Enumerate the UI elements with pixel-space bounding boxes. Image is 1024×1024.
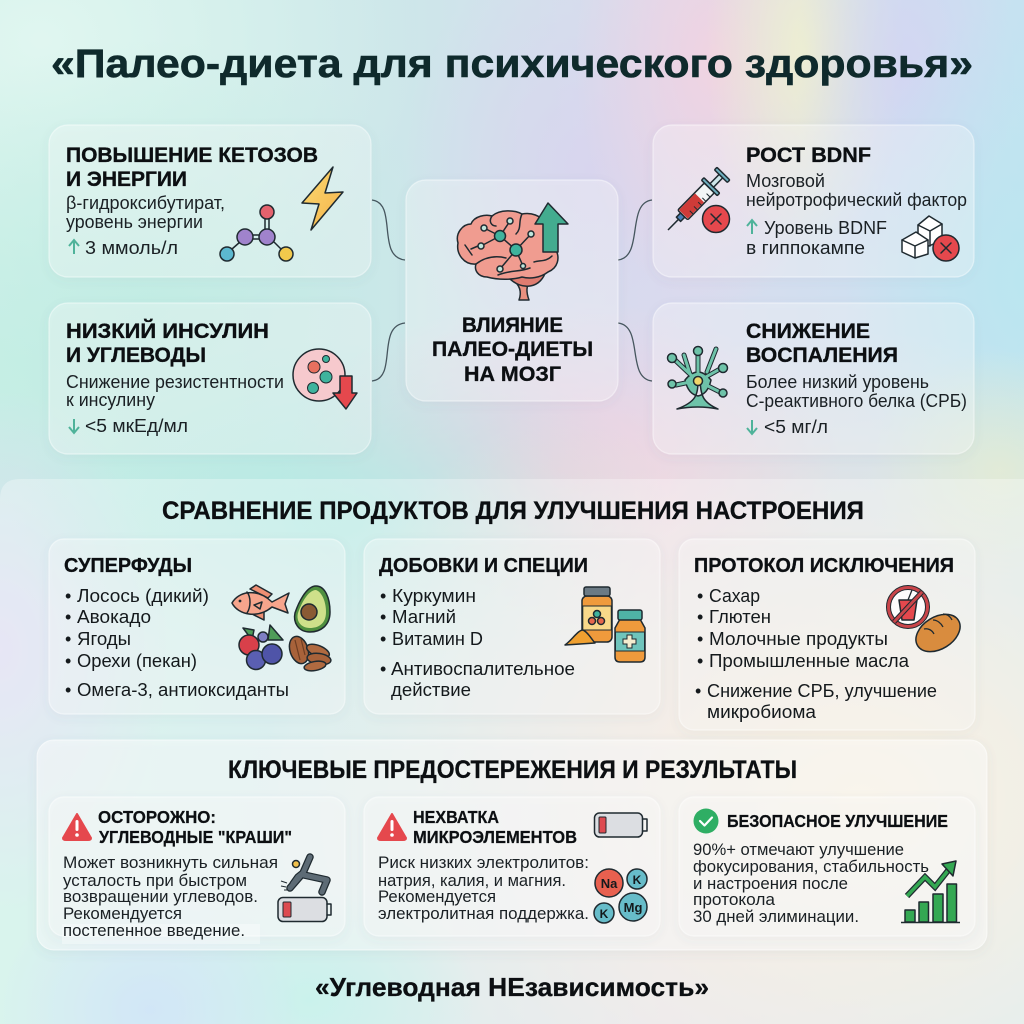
icon: supplement jar with powder — [565, 587, 612, 645]
text: inflammation description: С-реактивного белка (СРБ) — [746, 391, 967, 411]
card: safe improvement — [679, 797, 975, 936]
heading: food comparison: СРАВНЕНИЕ ПРОДУКТОВ ДЛЯ УЛУЧШЕНИЯ НАСТРОЕНИЯ — [162, 497, 864, 525]
list: elimination: • — [697, 629, 703, 649]
heading: insulin — [66, 318, 269, 367]
list: elimination: микробиома — [707, 702, 817, 722]
list: supplements: действие — [391, 680, 471, 700]
panel: warnings and results — [37, 740, 987, 950]
text: carb crashes: усталость при быстром — [63, 871, 247, 890]
connector: insulin card to centre — [372, 323, 405, 381]
list: superfoods: • — [65, 629, 71, 649]
list: superfoods: • — [65, 680, 71, 700]
icon: neuron — [668, 346, 728, 409]
panel: superfoods — [49, 539, 345, 714]
list: supplements — [380, 586, 575, 700]
card: carb crashes — [49, 797, 345, 944]
list: elimination: • — [697, 607, 703, 627]
list: superfoods: Омега-3, антиоксиданты — [77, 680, 289, 700]
text: carb crashes: постепенное введение. — [63, 921, 245, 940]
list: supplements: Магний — [392, 607, 456, 627]
heading: supplements: ДОБОВКИ И СПЕЦИИ — [379, 554, 588, 577]
text: BDNF description: нейротрофический фактор — [746, 190, 967, 210]
heading: ketones: И ЭНЕРГИИ — [66, 167, 187, 191]
text: safe improvement: фокусирования, стабильность — [693, 857, 929, 876]
list: elimination: Промышленные масла — [709, 651, 910, 671]
list: supplements: • — [380, 629, 386, 649]
panel: elimination protocol — [679, 539, 975, 730]
text: micronutrients: электролитная поддержка. — [378, 904, 589, 923]
icon: electrolytes — [594, 869, 647, 923]
heading: ketones — [66, 143, 318, 191]
icon: falling person — [281, 857, 327, 892]
heading: carb crashes — [98, 807, 292, 847]
list: elimination: • — [697, 586, 703, 606]
icon: low battery — [594, 813, 647, 837]
icon: electrolytes: Na — [601, 876, 618, 891]
icon: salmon — [232, 585, 289, 620]
icon: growth chart — [901, 861, 960, 922]
icon: syringe with cross — [660, 166, 731, 238]
icon: molecule — [220, 205, 293, 261]
icon: lightning bolt — [302, 167, 343, 230]
heading: micronutrients: НЕХВАТКА — [413, 807, 499, 827]
text: insulin description — [66, 372, 284, 410]
heading: ketones: ПОВЫШЕНИЕ КЕТОЗОВ — [66, 143, 318, 167]
list: supplements: Куркумин — [392, 586, 476, 606]
icon: brain with up arrow — [457, 203, 568, 300]
icon: electrolytes: K — [633, 873, 642, 887]
list: superfoods: • — [65, 607, 71, 627]
heading: inflammation — [746, 319, 898, 367]
text: safe improvement: 90%+ отмечают улучшение — [693, 840, 904, 859]
panel: supplements and spices — [364, 539, 660, 714]
text: ketones description: уровень энергии — [66, 212, 203, 232]
text: carb crashes — [63, 853, 278, 940]
icon: warning triangle — [63, 814, 91, 840]
text: carb crashes: Рекомендуется — [63, 904, 182, 923]
heading: carb crashes: ОСТОРОЖНО: — [98, 807, 216, 827]
heading: BDNF: РОСТ BDNF — [746, 143, 871, 167]
icon: berries — [239, 625, 283, 670]
text: carb crashes: Может возникнуть сильная — [63, 853, 278, 872]
footer tagline: «Углеводная НЕзависимость» — [315, 972, 709, 1002]
panel: reduced inflammation — [653, 303, 974, 454]
text: safe improvement: и настроения после — [693, 874, 848, 893]
icon: no sugary drink — [888, 588, 928, 626]
metric: BDNF in hippocampus — [746, 218, 887, 258]
metric: 3 mmol/l: 3 ммоль/л — [85, 238, 178, 258]
heading: elimination: ПРОТОКОЛ ИСКЛЮЧЕНИЯ — [694, 554, 954, 577]
text: micronutrients — [378, 853, 589, 923]
text: inflammation description: Более низкий уровень — [746, 372, 929, 392]
connector: ketosis card to centre — [372, 200, 405, 260]
list: supplements: • — [380, 659, 386, 679]
list: superfoods: Авокадо — [77, 607, 151, 627]
list: elimination — [695, 586, 937, 722]
panel: ketones and energy — [49, 125, 371, 277]
text: BDNF description: Мозговой — [746, 171, 825, 191]
text: micronutrients: Рекомендуется — [378, 887, 496, 906]
icon: avocado — [295, 586, 330, 632]
icon: sugar cubes with cross — [902, 216, 959, 261]
heading: micronutrients — [413, 807, 577, 847]
heading: warnings and results: КЛЮЧЕВЫЕ ПРЕДОСТЕРЕЖЕНИЯ И РЕЗУЛЬТАТЫ — [228, 756, 797, 784]
heading: inflammation: СНИЖЕНИЕ — [746, 319, 870, 343]
panel: low insulin and carbs — [49, 303, 371, 454]
panel: BDNF growth — [653, 125, 974, 277]
connector: centre to inflammation card — [618, 323, 652, 381]
icon: pecans — [286, 634, 332, 672]
text: micronutrients: натрия, калия, и магния. — [378, 871, 566, 890]
list: superfoods: Орехи (пекан) — [77, 651, 197, 671]
metric: BDNF in hippocampus: в гиппокампе — [746, 238, 865, 258]
text: insulin description: к инсулину — [66, 390, 155, 410]
heading: micronutrients: МИКРОЭЛЕМЕНТОВ — [413, 827, 577, 847]
title: «Палео-диета для психического здоровья» — [51, 42, 973, 86]
list: elimination: Глютен — [709, 607, 771, 627]
panel: central brain card — [406, 180, 618, 401]
list: supplements: • — [380, 586, 386, 606]
heading: carb crashes: УГЛЕВОДНЫЕ "КРАШИ" — [99, 827, 292, 847]
icon: cell with down arrow — [293, 349, 357, 409]
text: ketones description: β-гидроксибутират, — [66, 193, 225, 213]
list: superfoods: • — [65, 651, 71, 671]
heading: brain card — [432, 313, 593, 386]
list: elimination: • — [697, 651, 703, 671]
heading: brain card: ВЛИЯНИЕ — [462, 313, 563, 337]
list: superfoods: Лосось (дикий) — [77, 586, 209, 606]
text: inflammation description — [746, 372, 967, 411]
text: safe improvement: протокола — [693, 890, 776, 909]
icon: warning triangle — [378, 814, 406, 840]
text: safe improvement — [693, 840, 929, 926]
panel: comparison section backdrop — [0, 479, 1024, 1024]
icon: electrolytes: Mg — [624, 900, 642, 915]
text: safe improvement: 30 дней элиминации. — [693, 907, 859, 926]
text: insulin description: Снижение резистентности — [66, 372, 284, 392]
text: ketones description — [66, 193, 225, 232]
connector: centre to BDNF card — [618, 200, 652, 260]
heading: safe improvement: БЕЗОПАСНОЕ УЛУЧШЕНИЕ — [727, 811, 948, 831]
icon: medicine bottle — [615, 610, 645, 662]
heading: inflammation: ВОСПАЛЕНИЯ — [746, 343, 898, 367]
list: supplements: Антивоспалительное — [391, 659, 575, 679]
list: superfoods: • — [65, 586, 71, 606]
heading: brain card: НА МОЗГ — [464, 362, 561, 386]
list: superfoods: Ягоды — [77, 629, 131, 649]
text: BDNF description — [746, 171, 967, 210]
icon: low battery — [278, 898, 331, 922]
heading: insulin: НИЗКИЙ ИНСУЛИН — [66, 318, 269, 343]
list: elimination: • — [695, 681, 701, 701]
heading: insulin: И УГЛЕВОДЫ — [66, 343, 206, 367]
list: elimination: Сахар — [709, 586, 760, 606]
list: elimination: Молочные продукты — [709, 629, 888, 649]
card: micronutrient shortage — [364, 797, 660, 936]
list: supplements: • — [380, 607, 386, 627]
metric: CRP level: <5 мг/л — [764, 417, 828, 437]
icon: green check — [694, 808, 718, 834]
icon: bread loaf — [909, 607, 967, 659]
list: supplements: Витамин D — [392, 629, 483, 649]
text: micronutrients: Риск низких электролитов: — [378, 853, 589, 872]
text: carb crashes: возвращении углеводов. — [63, 887, 258, 906]
heading: brain card: ПАЛЕО-ДИЕТЫ — [432, 337, 593, 361]
heading: superfoods: СУПЕРФУДЫ — [64, 554, 192, 577]
list: elimination: Снижение СРБ, улучшение — [707, 681, 937, 701]
metric: insulin level: <5 мкЕд/мл — [85, 416, 188, 436]
icon: electrolytes: K — [600, 907, 609, 921]
list: superfoods — [65, 586, 289, 700]
metric: BDNF in hippocampus: Уровень BDNF — [764, 218, 887, 238]
